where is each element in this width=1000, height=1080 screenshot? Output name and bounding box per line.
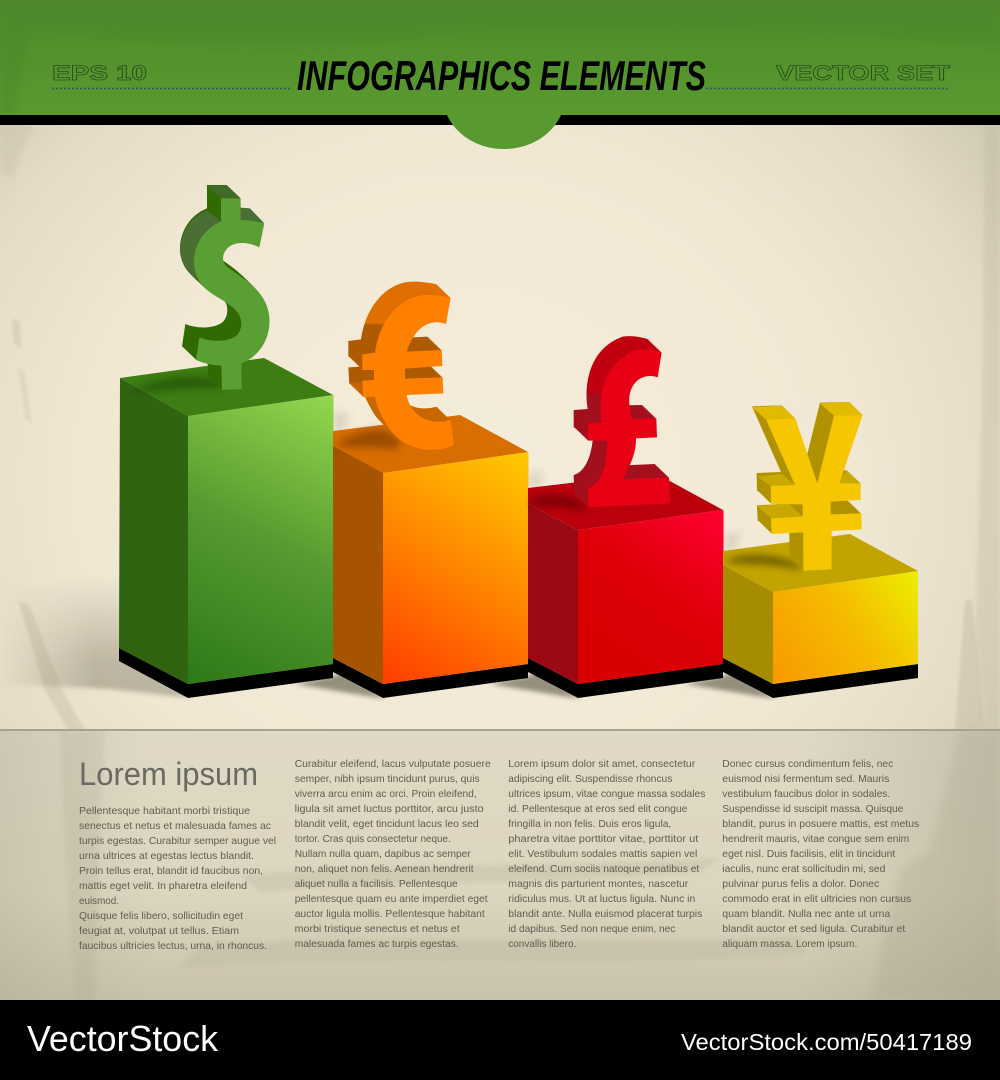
label: EPS 10: EPS 10 <box>52 62 147 85</box>
text column 4: commodo erat in elit ultricies non cursus <box>722 894 911 905</box>
text column 2: ligula sit amet luctus porttitor, arcu justo <box>295 804 484 815</box>
text column 1: mattis eget velit. In pharetra eleifend <box>79 881 247 892</box>
text column 1: urna ultrices at egestas lectus blandit. <box>79 851 254 862</box>
symbol: pound <box>530 336 670 512</box>
text column 4: blandit auctor et sed ligula. Curabitur et <box>722 924 905 935</box>
text column 2: aliquet nulla a facilisis. Pellentesque <box>295 879 458 890</box>
ground shadows <box>0 412 775 699</box>
text column 2: viverra arcu enim ac orci. Proin eleifend, <box>295 789 477 800</box>
text column 4: quam blandit. Nulla nec ante ut urna <box>722 909 891 920</box>
text column 1 <box>79 806 276 952</box>
text column 2: non, aliquet non felis. Aenean hendrerit <box>295 864 474 875</box>
watermark logo: VectorStock <box>27 1018 219 1059</box>
text column 3: pharetra vitae porttitor vitae, porttitor ut <box>508 834 698 845</box>
text column 4: hendrerit mauris, vitae congue sem enim <box>722 834 909 845</box>
text column 3: Lorem ipsum dolor sit amet, consectetur <box>508 759 696 770</box>
footer watermark bar <box>0 1000 1000 1080</box>
text column 2: tortor. Cras quis consectetur neque. <box>295 834 451 845</box>
text column 3 <box>508 759 705 950</box>
symbol: yen <box>726 402 863 571</box>
text column 1: Proin tellus erat, blandit id faucibus non, <box>79 866 263 877</box>
text column 4: aliquam massa. Lorem ipsum. <box>722 939 857 950</box>
text column 4: Donec cursus condimentum felis, nec <box>722 759 893 770</box>
text column 4: Suspendisse id suscipit massa. Quisque <box>722 804 904 815</box>
title: INFOGRAPHICS ELEMENTS <box>297 52 706 99</box>
bar: red pound <box>528 473 724 698</box>
text column 2: semper, nibh ipsum tincidunt purus, quis <box>295 774 480 785</box>
paper background <box>0 110 1000 730</box>
bar: orange euro <box>333 415 528 698</box>
text column 4: iaculis, nunc erat sollicitudin mi, sed <box>722 864 886 875</box>
black strip <box>0 115 1000 125</box>
text column 4 <box>722 759 919 950</box>
dotted rule right <box>706 88 950 90</box>
text column 3: magnis dis parturient montes, nascetur <box>508 879 689 890</box>
lower text panel background <box>0 729 1000 1000</box>
text column 3: adipiscing elit. Suspendisse rhoncus <box>508 774 672 785</box>
text column 2: Nullam nulla quam, dapibus ac semper <box>295 849 471 860</box>
text column 4: vestibulum faucibus dolor in sodales. <box>722 789 890 800</box>
bar: yellow yen <box>723 534 918 698</box>
label: vector set: VECTOR SET <box>776 62 950 85</box>
text column 1: feugiat at, volutpat ut tellus. Etiam <box>79 926 239 937</box>
text column 2: pellentesque quam eu ante imperdiet eget <box>295 894 488 905</box>
text column 2: malesuada fames ac turpis egestas. <box>295 939 459 950</box>
text column 3: ridiculus mus. Ut at luctus ligula. Nunc in <box>508 894 696 905</box>
text column 4: eget nisl. Duis facilisis, elit in tincidunt <box>722 849 895 860</box>
text column 4: pulvinar purus felis a dolor. Donec <box>722 879 879 890</box>
text column 3: id dapibus. Sed non neque enim, nec <box>508 924 675 935</box>
text column 4: euismod nisi fermentum sed. Mauris <box>722 774 889 785</box>
text column 4: blandit, purus in posuere mattis, est metus <box>722 819 919 830</box>
bar: green dollar <box>119 358 334 698</box>
watermark url: VectorStock.com/50417189 <box>681 1029 972 1055</box>
symbol: euro <box>335 282 454 450</box>
text column 1: senectus et netus et malesuada fames ac <box>79 821 271 832</box>
header band <box>0 0 1000 149</box>
heading: Lorem ipsum: Lorem ipsum <box>79 756 258 792</box>
symbol: dollar <box>130 185 270 392</box>
text column 3: convallis libero. <box>508 939 576 950</box>
dotted rule left <box>52 88 290 90</box>
text column 3: ultrices ipsum, vitae congue massa sodales <box>508 789 705 800</box>
text column 3: blandit ante. Nulla euismod placerat turpis <box>508 909 702 920</box>
text column 1: Quisque felis libero, sollicitudin eget <box>79 911 243 922</box>
text column 3: id. Pellentesque at eros sed elit congue <box>508 804 688 815</box>
paper brush texture <box>0 125 1000 730</box>
text column 3: eleifend. Cum sociis natoque penatibus et <box>508 864 699 875</box>
text column 2: auctor ligula mollis. Pellentesque habitant <box>295 909 485 920</box>
text column 3: fringilla in non felis. Duis eros ligula, <box>508 819 671 830</box>
header tab <box>447 115 561 149</box>
text column 3: elit. Vestibulum sodales mattis sapien vel <box>508 849 697 860</box>
text column 1: Pellentesque habitant morbi tristique <box>79 806 250 817</box>
text column 2: Curabitur eleifend, lacus vulputate posuere <box>295 759 491 770</box>
text column 1: turpis egestas. Curabitur semper augue vel <box>79 836 276 847</box>
text column 2: morbi tristique senectus et netus et <box>295 924 460 935</box>
text column 2 <box>295 759 491 950</box>
text column 2: blandit velit, eget tincidunt lacus leo sed <box>295 819 479 830</box>
text column 1: faucibus ultricies lectus, urna, in rhoncus. <box>79 941 267 952</box>
text column 1: euismod. <box>79 896 119 907</box>
